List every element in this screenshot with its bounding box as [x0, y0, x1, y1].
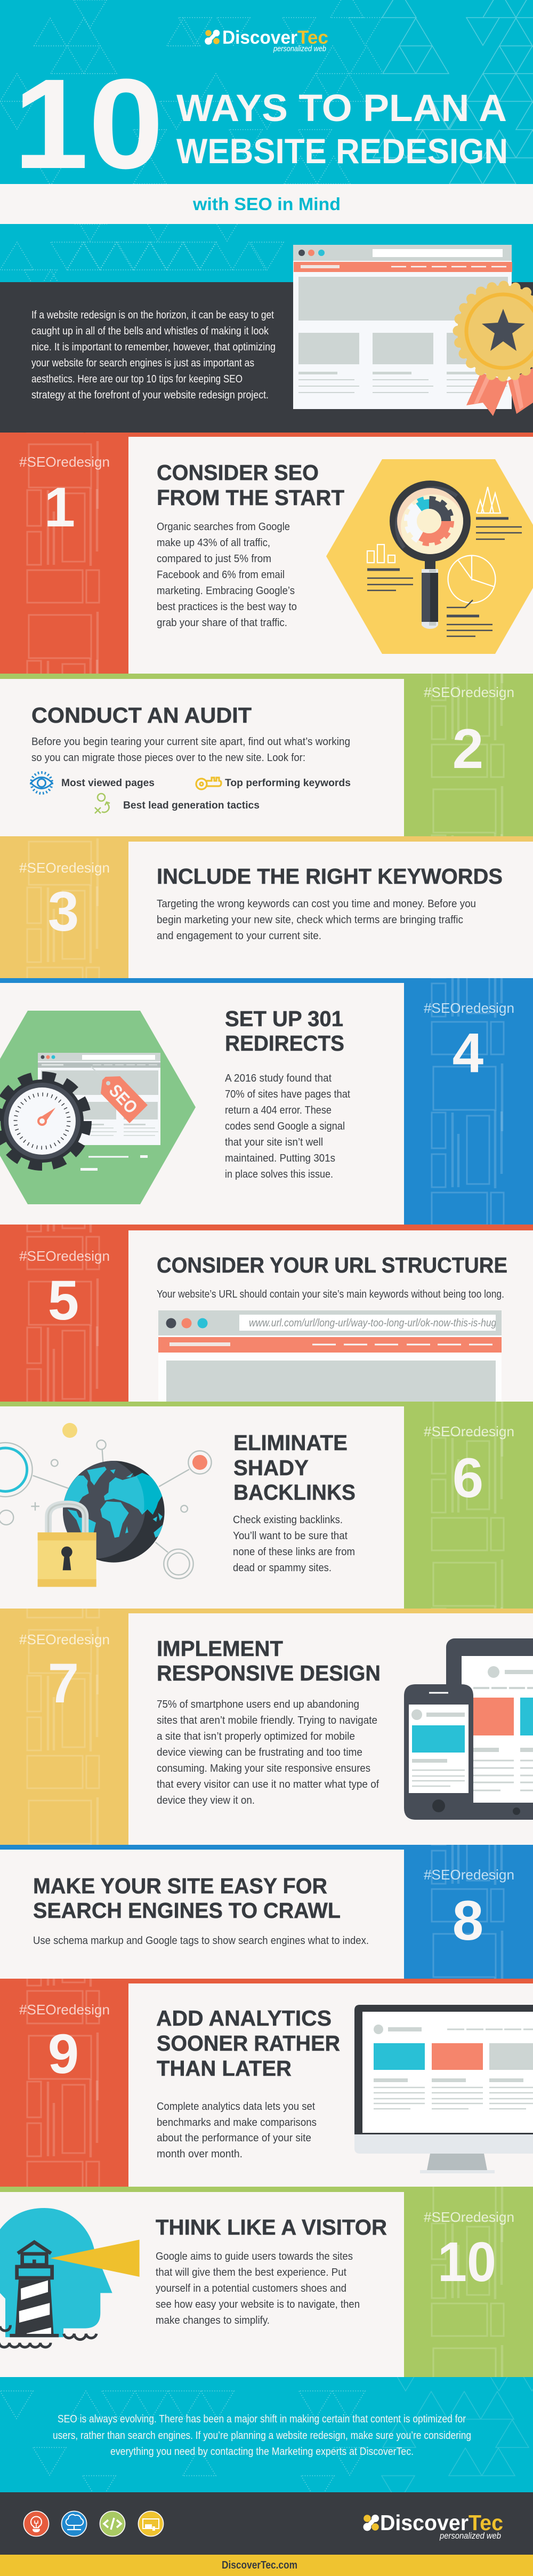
body text: Organic searches from Google: [157, 521, 290, 533]
body text: yourself in a potential customers shoes and: [156, 2282, 346, 2294]
step number: 3: [48, 881, 79, 943]
icon: phone: [404, 1684, 473, 1820]
icon: award badge: [457, 285, 533, 416]
illustration: tablet and phone: [404, 1638, 533, 1820]
logo: footer DiscoverTec: Tec: [469, 2510, 503, 2535]
heading: SET UP 301: [225, 1006, 343, 1031]
panel: footer: [0, 2492, 533, 2555]
step number: 5: [48, 1269, 79, 1332]
icon: light bulb: [23, 2511, 49, 2537]
hashtag: #SEOredesign: [19, 860, 110, 876]
heading: CONSIDER YOUR URL STRUCTURE: [157, 1253, 507, 1277]
browser window: [38, 1053, 160, 1145]
icon: lighthouse: [10, 2242, 59, 2337]
icon: responsive screens: [139, 2511, 163, 2537]
illustration: desktop monitor: [354, 2005, 533, 2173]
logo: DiscoverTec: [205, 27, 328, 53]
panel: introduction: [0, 245, 533, 433]
title: [13, 52, 508, 195]
body text: make up 43% of all traffic,: [157, 537, 270, 549]
heading: ELIMINATE: [233, 1430, 348, 1455]
icon: speed gauge: [0, 1076, 87, 1166]
step number: 4: [453, 1022, 483, 1084]
step number: 10: [438, 2231, 496, 2293]
closing text: users, rather than search engines. If you’re planning a website redesign, make sure you’re considering: [53, 2429, 471, 2442]
heading: RESPONSIVE DESIGN: [157, 1661, 381, 1685]
body text: Use schema markup and Google tags to show search engines what to index.: [33, 1934, 369, 1947]
body text: that will give them the best experience. Put: [156, 2266, 346, 2278]
body text: dead or spammy sites.: [233, 1562, 332, 1574]
body text: about the performance of your site: [157, 2132, 311, 2144]
body text: [233, 1514, 355, 1574]
step number: 7: [48, 1652, 79, 1715]
body text: A 2016 study found that: [225, 1072, 332, 1084]
panel: closing message: [0, 2377, 533, 2492]
body text: month over month.: [157, 2148, 243, 2160]
body text: that your site isn’t well: [225, 1136, 323, 1148]
panel: step 10 think like a visitor: [0, 2187, 533, 2377]
body text: 70% of sites have pages that: [225, 1088, 350, 1100]
heading: ADD ANALYTICS: [156, 2006, 332, 2030]
heading: REDIRECTS: [225, 1031, 344, 1055]
body text: [31, 735, 350, 764]
icon: logo mark: [205, 30, 220, 45]
hashtag: #SEOredesign: [424, 1867, 514, 1883]
network nodes: [0, 1440, 212, 1579]
body text: best practices is the best way to: [157, 601, 297, 613]
heading: [157, 1636, 381, 1685]
icon: code brackets: [100, 2511, 125, 2537]
body text: see how easy your website is to navigate, then: [156, 2298, 360, 2310]
list item: top performing keywords: Top performing keywords: [225, 778, 351, 789]
body text: a site that isn’t properly optimized for mobile: [157, 1730, 355, 1742]
body text: return a 404 error. These: [225, 1104, 332, 1116]
illustration: lighthouse in head: [0, 2208, 140, 2347]
heading: [233, 1430, 356, 1505]
body text: sites that aren’t mobile friendly. Trying to navigate: [157, 1714, 377, 1726]
panel: step 3 include the right keywords: [0, 836, 533, 978]
icon: cloud network: [62, 2511, 86, 2537]
body text: Targeting the wrong keywords can cost you time and money. Before you: [157, 898, 476, 910]
hashtag: #SEOredesign: [19, 1248, 110, 1264]
step number: 9: [48, 2023, 79, 2085]
icon: play diagram: [95, 794, 110, 813]
intro text: strategy at the forefront of your website redesign project.: [31, 389, 269, 401]
body text: begin marketing your new site, check which terms are bringing traffic: [157, 914, 463, 926]
list item: most viewed pages: Most viewed pages: [61, 778, 155, 789]
intro text: your website for search engines is just as important as: [31, 357, 254, 369]
icon: padlock: [38, 1504, 96, 1587]
heading: MAKE YOUR SITE EASY FOR: [33, 1874, 327, 1898]
illustration: globe with padlock: [0, 1423, 212, 1587]
body text: Before you begin tearing your current site apart, find out what’s working: [31, 735, 350, 748]
body text: You’ll want to be sure that: [233, 1530, 348, 1542]
intro text: [31, 309, 276, 401]
intro text: If a website redesign is on the horizon, it can be easy to get: [31, 309, 274, 321]
heading: THAN LATER: [157, 2056, 292, 2081]
body text: 75% of smartphone users end up abandoning: [157, 1698, 359, 1710]
panel: step 7 implement responsive design: [0, 1609, 533, 1845]
closing text: [53, 2413, 471, 2458]
body text: grab your share of that traffic.: [157, 617, 287, 629]
logo: footer DiscoverTec: [364, 2510, 503, 2541]
body text: Google aims to guide users towards the sites: [156, 2250, 353, 2262]
logo tagline: personalized web: [273, 44, 326, 53]
hashtag: #SEOredesign: [424, 2209, 514, 2225]
icon: pie chart: [448, 555, 496, 603]
closing text: SEO is always evolving. There has been a major shift in making certain that content is optimized for: [58, 2413, 466, 2425]
panel: step 6 eliminate shady backlinks: [0, 1402, 533, 1609]
heading: [225, 1006, 344, 1055]
illustration: browser with long URL: [158, 1310, 502, 1402]
hashtag: #SEOredesign: [424, 684, 514, 700]
heading: SEARCH ENGINES TO CRAWL: [33, 1898, 341, 1923]
logo wordmark accent: Tec: [297, 27, 328, 48]
body text: codes send Google a signal: [225, 1120, 345, 1132]
illustration: magnifier over charts: [326, 459, 533, 654]
hashtag: #SEOredesign: [19, 454, 110, 470]
body text: Facebook and 6% from email: [157, 569, 285, 581]
subtitle: with SEO in Mind: [192, 194, 341, 214]
panel: step 2 conduct an audit: [0, 674, 533, 836]
step number: 2: [453, 718, 483, 780]
panel: step 1 consider SEO: [0, 433, 533, 674]
panel: header background: [0, 0, 533, 282]
heading: CONDUCT AN AUDIT: [31, 703, 252, 727]
big number 10: 10: [13, 52, 164, 195]
body text: device they view it on.: [157, 1794, 255, 1806]
step number: 6: [453, 1447, 483, 1509]
body text: consuming. Making your site responsive ensures: [157, 1762, 370, 1774]
body text: benchmarks and make comparisons: [157, 2116, 317, 2129]
footer URL bar: [0, 2555, 533, 2576]
subtitle band: [0, 184, 533, 224]
website address: DiscoverTec.com: [222, 2559, 297, 2571]
body text: in place solves this issue.: [225, 1168, 333, 1180]
step number: 1: [44, 476, 75, 539]
body text: compared to just 5% from: [157, 553, 271, 565]
closing text: everything you need by contacting the Marketing experts at DiscoverTec.: [110, 2445, 414, 2458]
logo: footer DiscoverTec: personalized web: [439, 2531, 501, 2541]
panel: step 5 consider your URL structure: [0, 1225, 533, 1402]
icon: globe: [63, 1461, 165, 1563]
heading: [33, 1874, 341, 1923]
heading: FROM THE START: [157, 485, 344, 510]
heading: SHADY: [233, 1455, 309, 1480]
heading: THINK LIKE A VISITOR: [156, 2215, 387, 2239]
logo wordmark: Discover: [222, 27, 297, 48]
body text: [157, 898, 476, 942]
light beam: [50, 2239, 140, 2277]
icon: magnifying glass: [390, 481, 471, 629]
intro text: caught up in all of the bells and whistles of making it look: [31, 325, 269, 337]
body text: that every visitor can use it no matter what type of: [157, 1778, 379, 1790]
head silhouette: [0, 2208, 112, 2337]
heading: [157, 460, 344, 510]
body text: so you can migrate those pieces over to the new site. Look for:: [31, 751, 305, 764]
icon: eye: [31, 772, 52, 794]
body text: [225, 1072, 350, 1180]
icon: bar chart: [367, 545, 395, 563]
body text: Check existing backlinks.: [233, 1514, 343, 1526]
panel: step 4 set up 301 redirects: [0, 978, 533, 1225]
hashtag: #SEOredesign: [424, 1423, 514, 1439]
body text: none of these links are from: [233, 1546, 355, 1558]
list item: best lead generation tactics: Best lead generation tactics: [123, 800, 260, 811]
title line 2: WEBSITE REDESIGN: [176, 131, 508, 171]
body text: [156, 2250, 360, 2326]
long URL text: www.url.com/url/long-url/way-too-long-url/ok-now-this-is-huge: [249, 1317, 502, 1329]
body text: maintained. Putting 301s: [225, 1152, 335, 1164]
intro text: aesthetics. Here are our top 10 tips for keeping SEO: [31, 373, 243, 385]
body text: [157, 1698, 379, 1806]
icon: SEO price tag: [91, 1067, 148, 1123]
heading: INCLUDE THE RIGHT KEYWORDS: [157, 864, 503, 889]
hashtag: #SEOredesign: [19, 2002, 110, 2018]
icon: tablet: [446, 1638, 533, 1820]
body text: Complete analytics data lets you set: [157, 2100, 315, 2113]
icon: peak chart: [477, 487, 500, 513]
panel: step 9 add analytics: [0, 1979, 533, 2187]
body text: and engagement to your current site.: [157, 930, 321, 942]
step number: 8: [453, 1890, 483, 1952]
heading: [156, 2006, 340, 2081]
heading: CONSIDER SEO: [157, 460, 319, 485]
body text: device viewing can be frustrating and too time: [157, 1746, 362, 1758]
illustration: browser mockup: [293, 245, 512, 409]
title line 1: WAYS TO PLAN A: [176, 87, 507, 130]
heading: SOONER RATHER: [157, 2031, 340, 2055]
icon: key: [196, 778, 221, 789]
hashtag: #SEOredesign: [424, 1000, 514, 1016]
body text: marketing. Embracing Google’s: [157, 585, 295, 597]
body text: make changes to simplify.: [156, 2314, 270, 2326]
waves: [0, 2325, 96, 2347]
logo: footer DiscoverTec: Discover: [380, 2510, 469, 2535]
panel: step 8 make your site easy to crawl: [0, 1845, 533, 1979]
body text: [157, 2100, 317, 2160]
heading: IMPLEMENT: [157, 1636, 283, 1661]
heading: BACKLINKS: [233, 1480, 356, 1505]
intro text: nice. It is important to remember, however, that optimizing: [31, 341, 276, 353]
hashtag: #SEOredesign: [19, 1631, 110, 1647]
body text: [157, 521, 297, 629]
icon: SEO price tag: SEO: [106, 1081, 142, 1117]
illustration: speed gauge and SEO tag: [0, 1011, 196, 1204]
